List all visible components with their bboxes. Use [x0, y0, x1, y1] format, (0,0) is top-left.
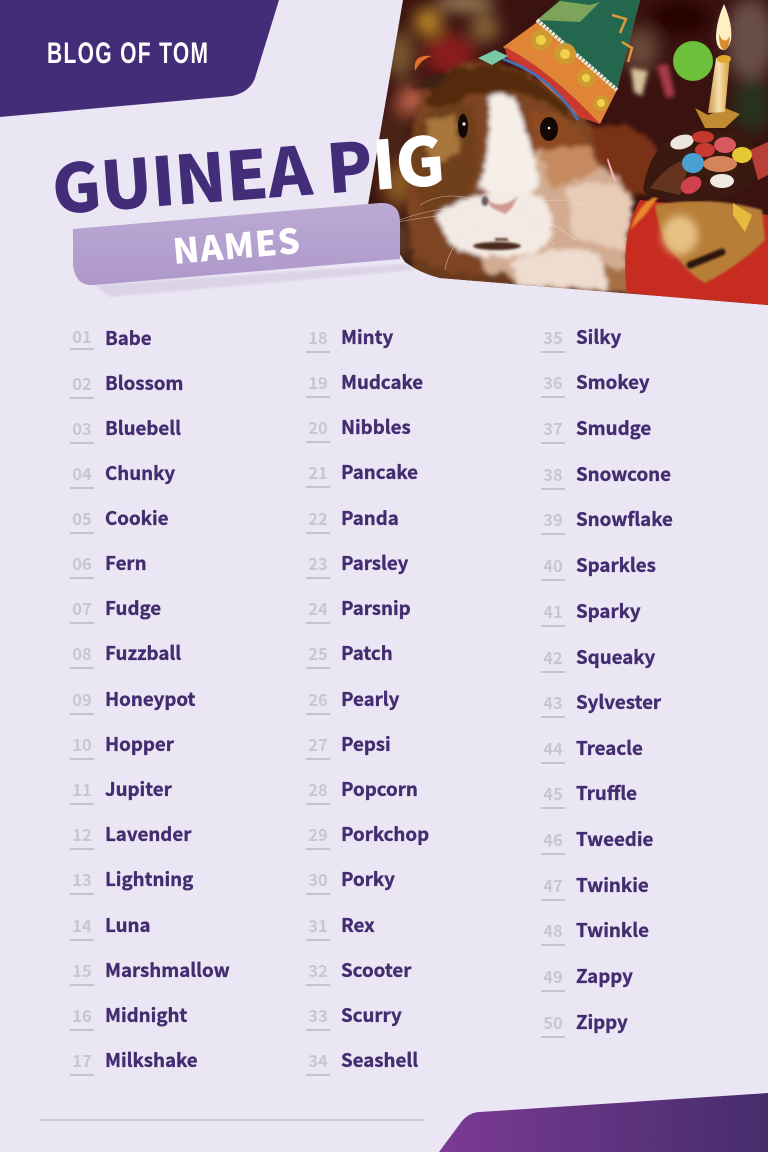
list row 42: Squeaky	[576, 643, 655, 670]
list row 04: 04	[72, 461, 92, 485]
list row 38	[541, 460, 671, 490]
list row 20	[306, 413, 411, 443]
list row 30: 30	[308, 867, 328, 891]
list row 41: Sparky	[576, 597, 641, 624]
list row 06	[70, 549, 147, 579]
list row 34: Seashell	[341, 1046, 418, 1073]
list row 15: 15	[72, 958, 92, 982]
list row 46: 46	[543, 827, 563, 851]
list row 21: 21	[308, 460, 328, 484]
list row 09: Honeypot	[105, 685, 195, 712]
list row 50: 50	[543, 1010, 563, 1034]
list row 36: 36	[543, 370, 563, 394]
list row 29: Porkchop	[341, 820, 429, 847]
list row 44: 44	[543, 736, 563, 760]
list row 05	[70, 504, 168, 534]
list row 04: Chunky	[105, 459, 175, 486]
list row 46	[541, 824, 741, 855]
list row 37: Smudge	[576, 414, 651, 441]
list row 03	[70, 414, 181, 444]
list row 31: 31	[308, 913, 328, 937]
photo: guinea pig with party hat and cupcake	[360, 0, 768, 310]
list row 31: Rex	[341, 911, 375, 938]
list row 25	[306, 639, 393, 669]
footer rule	[40, 1119, 425, 1121]
list row 10: Hopper	[105, 730, 174, 757]
list row 02: 02	[72, 371, 92, 395]
list row 41	[541, 596, 741, 627]
list row 17: 17	[72, 1048, 92, 1072]
list row 25: 25	[308, 641, 328, 665]
list row 44	[541, 733, 741, 764]
list row 02: Blossom	[105, 369, 183, 396]
list row 18: Minty	[341, 323, 393, 350]
list row 23: Parsley	[341, 549, 408, 576]
list row 32	[306, 956, 412, 986]
list row 40: 40	[543, 553, 563, 577]
party hat	[478, 0, 640, 124]
list row 28	[306, 775, 418, 805]
list row 07	[70, 594, 161, 624]
list row 17	[70, 1046, 198, 1076]
list row 48	[541, 915, 741, 946]
list row 35: 35	[543, 325, 563, 349]
list row 09: 09	[72, 687, 92, 711]
list row 47: 47	[543, 873, 563, 897]
list row 37	[541, 414, 651, 444]
list row 22	[306, 504, 399, 534]
list row 21	[306, 458, 418, 488]
list row 36	[541, 368, 650, 398]
list row 23	[306, 549, 408, 579]
list row 04	[70, 459, 175, 489]
list row 01: Babe	[105, 324, 152, 351]
list row 14	[70, 911, 151, 941]
list row 21: Pancake	[341, 458, 418, 485]
list row 10: 10	[72, 732, 92, 756]
list row 27: 27	[308, 732, 328, 756]
list row 35: Silky	[576, 323, 621, 350]
list row 30	[306, 865, 395, 895]
list row 19	[306, 368, 423, 398]
list row 28: 28	[308, 777, 328, 801]
guinea pig body	[398, 62, 665, 292]
list row 08	[70, 639, 181, 669]
eyes	[458, 114, 468, 138]
list row 41: 41	[543, 599, 563, 623]
whiskers	[398, 196, 585, 270]
list row 13: Lightning	[105, 865, 193, 892]
list row 11: 11	[72, 777, 92, 801]
list row 33	[306, 1001, 402, 1031]
list row 46: Tweedie	[576, 825, 653, 852]
list row 30: Porky	[341, 865, 395, 892]
list row 40: Sparkles	[576, 551, 656, 578]
list row 32: 32	[308, 958, 328, 982]
list row 47: Twinkie	[576, 871, 649, 898]
list row 05: Cookie	[105, 504, 168, 531]
list row 44: Treacle	[576, 734, 643, 761]
list row 23: 23	[308, 551, 328, 575]
list row 47	[541, 870, 741, 901]
list row 50: Zippy	[576, 1008, 628, 1035]
list row 45: 45	[543, 781, 563, 805]
list row 12: Lavender	[105, 820, 191, 847]
list row 18: 18	[308, 325, 328, 349]
list row 11: Jupiter	[105, 775, 172, 802]
list row 39: 39	[543, 507, 563, 531]
list row 20: 20	[308, 415, 328, 439]
list row 43: Sylvester	[576, 688, 661, 715]
confetti pieces in background	[415, 56, 675, 98]
list row 45: Truffle	[576, 779, 637, 806]
list row 48: 48	[543, 918, 563, 942]
list row 27: Pepsi	[341, 730, 391, 757]
list row 12: 12	[72, 822, 92, 846]
list row 12	[70, 820, 192, 850]
list row 07: Fudge	[105, 594, 161, 621]
list row 01: 01	[72, 324, 92, 348]
list row 38: 38	[543, 462, 563, 486]
list row 24: Parsnip	[341, 594, 411, 621]
list row 20: Nibbles	[341, 413, 411, 440]
list row 39: Snowflake	[576, 505, 673, 532]
list row 19: Mudcake	[341, 368, 423, 395]
list row 11	[70, 775, 172, 805]
list row 35	[541, 323, 622, 353]
list row 17: Milkshake	[105, 1046, 198, 1073]
list row 39	[541, 505, 673, 535]
list row 45	[541, 778, 741, 809]
list row 02	[70, 369, 183, 399]
list row 34: 34	[308, 1048, 328, 1072]
subtitle: NAMES	[171, 213, 303, 274]
list row 33: Scurry	[341, 1001, 402, 1028]
list row 43	[541, 687, 741, 718]
main title: GUINEA PIG	[48, 108, 448, 234]
logo text: BLOG OF TOM	[47, 38, 208, 70]
nose and mouth	[485, 196, 518, 214]
list row 27	[306, 730, 391, 760]
list row 01	[70, 324, 152, 351]
list row 22: Panda	[341, 504, 399, 531]
list row 05: 05	[72, 506, 92, 530]
list row 25: Patch	[341, 639, 393, 666]
list row 13	[70, 865, 194, 895]
list row 16: 16	[72, 1003, 92, 1027]
footer corner shape	[439, 1093, 768, 1152]
list row 33: 33	[308, 1003, 328, 1027]
list row 24	[306, 594, 411, 624]
list row 18	[306, 323, 394, 353]
ribbon shadow	[95, 264, 415, 297]
list row 43: 43	[543, 690, 563, 714]
list row 24: 24	[308, 596, 328, 620]
list row 14: 14	[72, 913, 92, 937]
list row 09	[70, 685, 196, 715]
list row 48: Twinkle	[576, 916, 649, 943]
list row 03: Bluebell	[105, 414, 181, 441]
list row 36: Smokey	[576, 368, 650, 395]
list row 38: Snowcone	[576, 460, 671, 487]
list row 15: Marshmallow	[105, 956, 230, 983]
top-left logo band	[0, 0, 279, 117]
list row 26: 26	[308, 687, 328, 711]
list row 37: 37	[543, 416, 563, 440]
ribbon: names	[73, 203, 400, 285]
list row 22: 22	[308, 506, 328, 530]
list row 49: 49	[543, 964, 563, 988]
list row 03: 03	[72, 416, 92, 440]
list row 42	[541, 642, 741, 673]
cupcake with candle	[625, 4, 768, 306]
list row 16: Midnight	[105, 1001, 187, 1028]
list row 49	[541, 961, 741, 992]
list row 19: 19	[308, 370, 328, 394]
list row 34	[306, 1046, 418, 1076]
green confetti dot	[673, 41, 713, 81]
list row 16	[70, 1001, 188, 1031]
list row 29: 29	[308, 822, 328, 846]
list row 28: Popcorn	[341, 775, 418, 802]
list row 26: Pearly	[341, 685, 399, 712]
list row 32: Scooter	[341, 956, 411, 983]
list row 08: 08	[72, 641, 92, 665]
list row 49: Zappy	[576, 962, 633, 989]
list row 26	[306, 685, 400, 715]
list row 06: Fern	[105, 549, 147, 576]
list row 29	[306, 820, 429, 850]
list row 42: 42	[543, 645, 563, 669]
list row 06: 06	[72, 551, 92, 575]
list row 13: 13	[72, 867, 92, 891]
list row 50	[541, 1007, 741, 1038]
list row 10	[70, 730, 174, 760]
list row 14: Luna	[105, 911, 151, 938]
list row 08: Fuzzball	[105, 639, 181, 666]
list row 31	[306, 911, 375, 941]
list row 40	[541, 551, 656, 581]
list row 07: 07	[72, 596, 92, 620]
